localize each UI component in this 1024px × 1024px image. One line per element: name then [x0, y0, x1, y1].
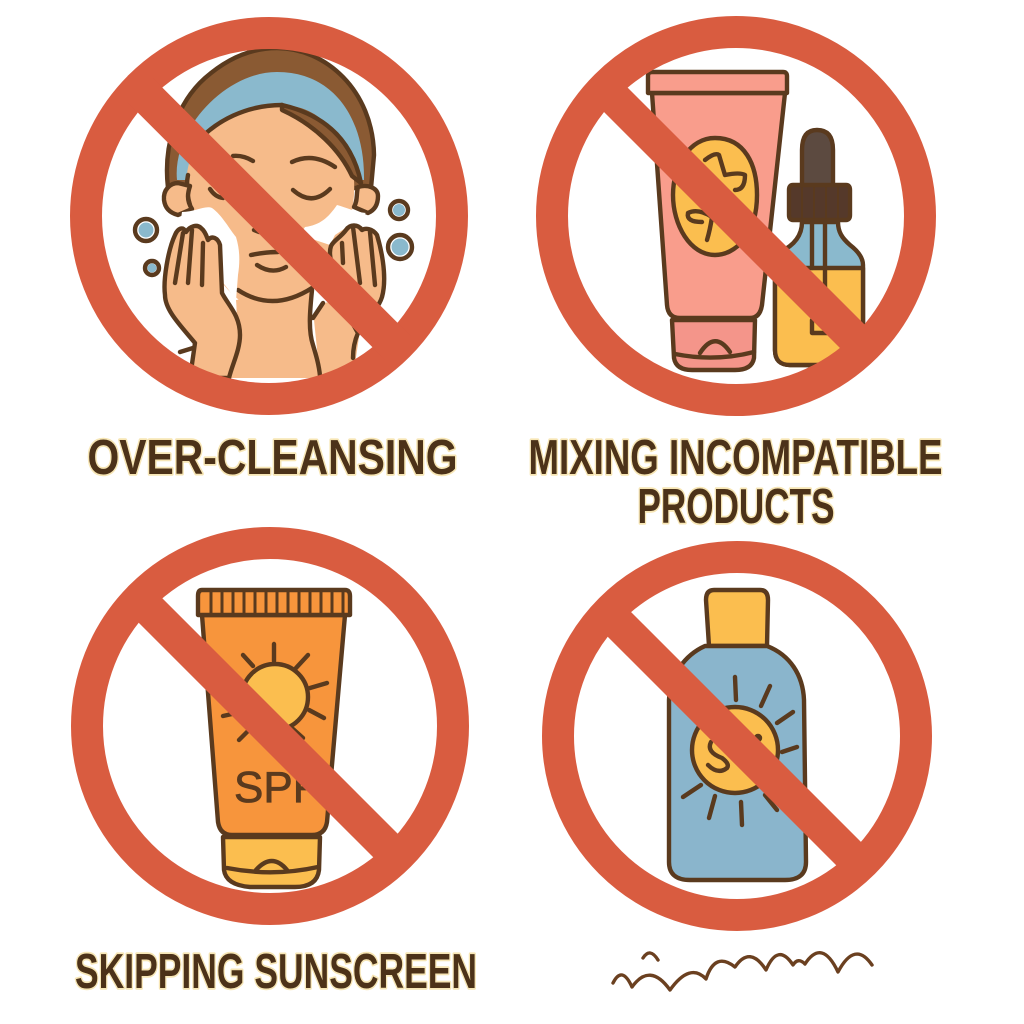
panel: sunscreen bottle [558, 557, 916, 990]
heading: skipping sunscreen: SKIPPING SUNSCREEN [75, 945, 477, 999]
icon: blue bottle [669, 590, 806, 880]
icon: prohibition sign [87, 543, 453, 909]
label: spf: SPF [234, 763, 320, 812]
icon: face washing [164, 48, 384, 378]
icon: prohibition sign [86, 33, 452, 399]
heading: mixing incompatible products [528, 431, 942, 534]
heading: over-cleansing: OVER-CLEANSING [88, 431, 458, 485]
panel: mixing incompatible products [528, 32, 942, 534]
icon: prohibition sign [558, 557, 916, 915]
panel: skipping sunscreen [75, 543, 477, 999]
icon: spf tube [198, 590, 350, 887]
icon: tube and dropper [648, 72, 863, 370]
icon: prohibition sign [552, 32, 920, 400]
icon: bubbles [135, 201, 412, 275]
scribbled label [613, 953, 872, 990]
panel: over-cleansing [86, 33, 458, 485]
heading: mixing incompatible products: PRODUCTS [638, 480, 834, 534]
